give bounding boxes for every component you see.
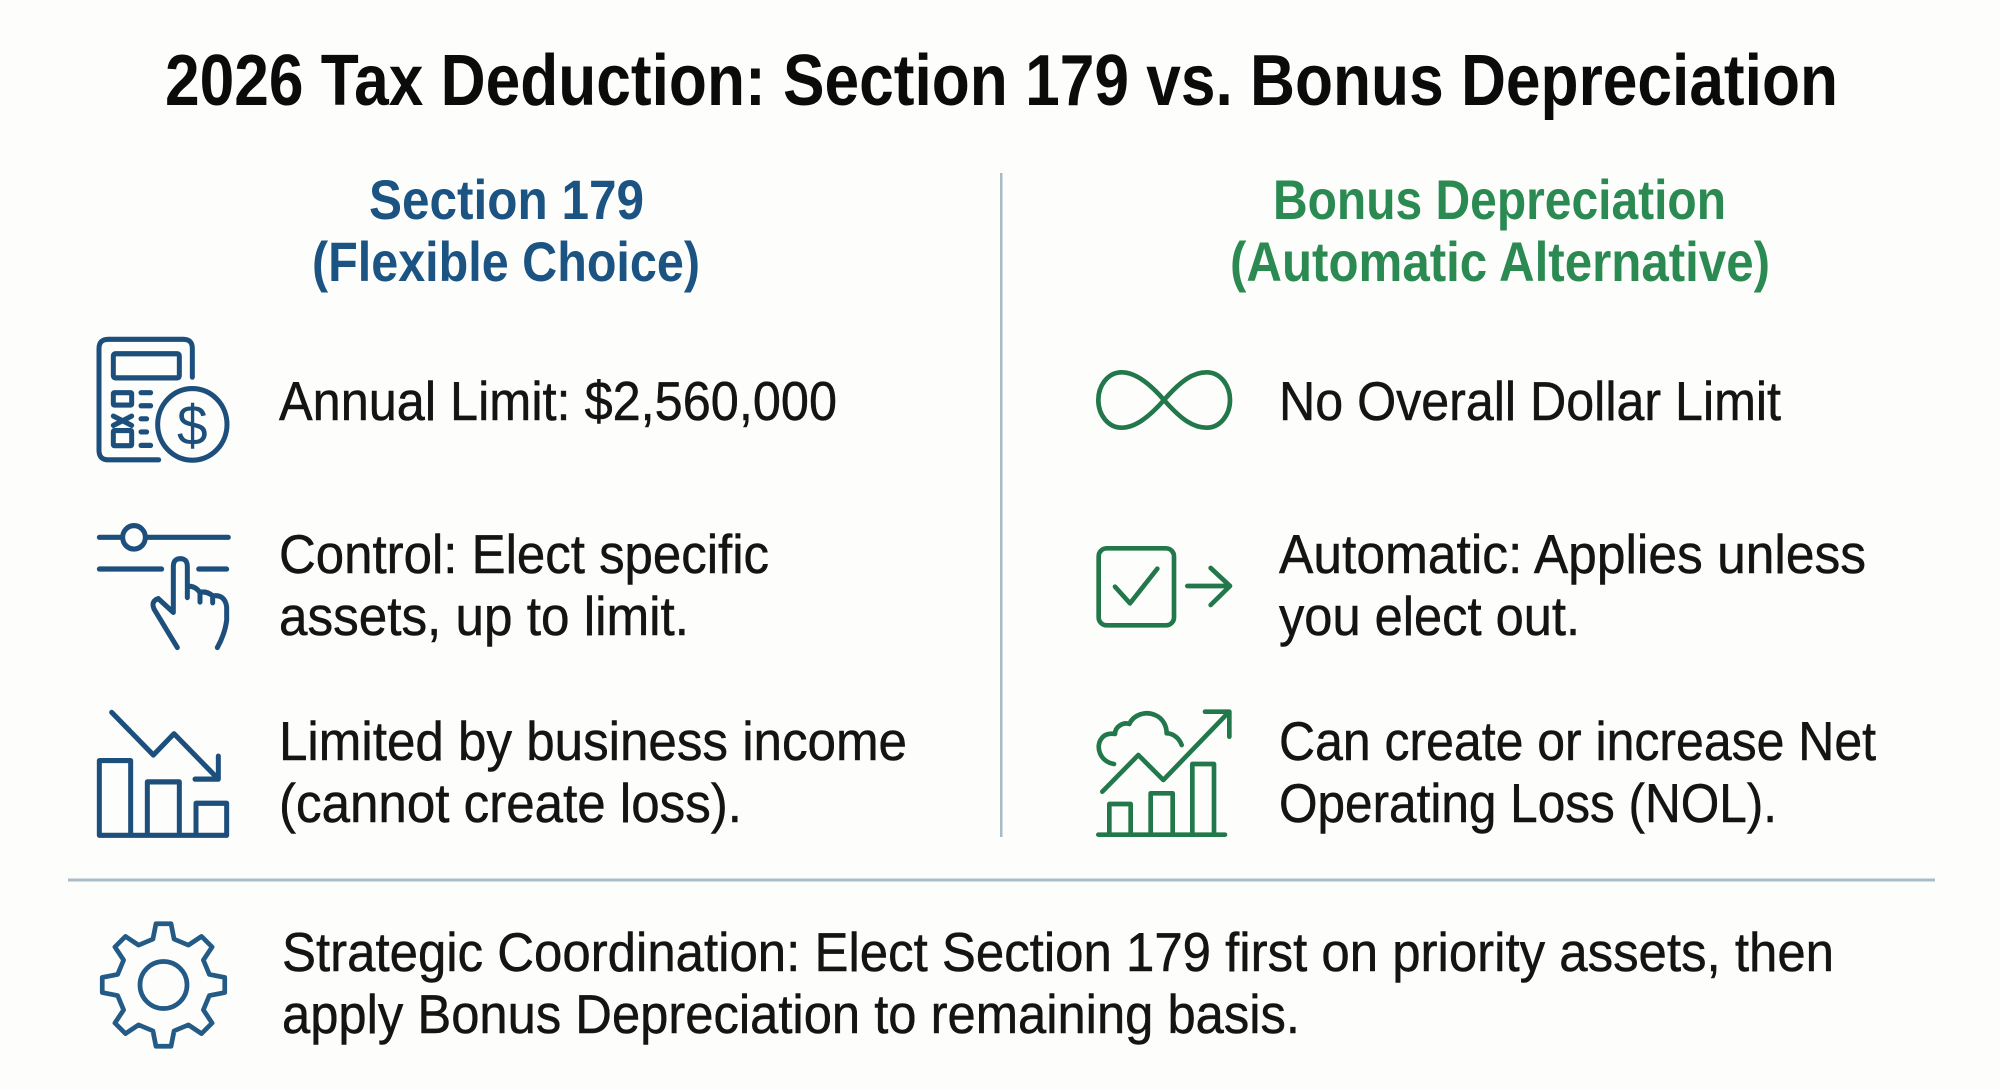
text: control: Control: Elect specific bbox=[279, 523, 769, 585]
heading: bonus depreciation: Bonus Depreciation bbox=[1273, 168, 1726, 231]
text: control: assets, up to limit. bbox=[279, 585, 689, 647]
icon: infinity bbox=[1098, 372, 1230, 428]
heading: bonus depreciation: (Automatic Alternative) bbox=[1230, 230, 1770, 293]
text: strategic coordination: apply Bonus Depreciation to remaining basis. bbox=[282, 983, 1300, 1045]
horizontal divider bbox=[68, 878, 1935, 882]
text: strategic coordination: Strategic Coordination: Elect Section 179 first on priority assets, then bbox=[282, 921, 1834, 983]
heading: section 179: (Flexible Choice) bbox=[312, 230, 700, 293]
heading: section 179 bbox=[312, 168, 700, 293]
heading: section 179: Section 179 bbox=[369, 168, 644, 231]
vertical divider bbox=[1000, 173, 1002, 837]
text: net operating loss: Can create or increase Net bbox=[1279, 710, 1876, 772]
text: net operating loss bbox=[1279, 710, 1876, 834]
panel: section 179 bbox=[99, 168, 907, 835]
icon: gear bbox=[102, 924, 225, 1046]
heading: bonus depreciation bbox=[1230, 168, 1770, 293]
text: limited by business income: (cannot create loss). bbox=[279, 772, 742, 834]
text: automatic: Automatic: Applies unless bbox=[1279, 523, 1866, 585]
icon: slider with pointing hand bbox=[99, 526, 228, 648]
text: limited by business income: Limited by business income bbox=[279, 710, 907, 772]
text: limited by business income bbox=[279, 710, 907, 834]
text: automatic: you elect out. bbox=[1279, 585, 1580, 647]
text: control bbox=[279, 523, 769, 647]
text: no overall dollar limit: No Overall Dollar Limit bbox=[1279, 370, 1781, 432]
icon: calculator with dollar coin bbox=[99, 339, 227, 460]
text: automatic bbox=[1279, 523, 1866, 647]
icon: checkbox with arrow bbox=[1099, 548, 1230, 625]
icon: declining chart bbox=[99, 712, 227, 835]
panel: bonus depreciation bbox=[1098, 168, 1876, 835]
text: annual limit: Annual Limit: $2,560,000 bbox=[279, 370, 837, 432]
text: strategic coordination bbox=[282, 921, 1834, 1045]
icon: cloud and rising chart bbox=[1098, 712, 1229, 835]
text: net operating loss: Operating Loss (NOL). bbox=[1279, 772, 1777, 834]
icon: calculator with dollar coin: $ bbox=[177, 393, 208, 457]
panel: strategic coordination bbox=[102, 921, 1834, 1046]
